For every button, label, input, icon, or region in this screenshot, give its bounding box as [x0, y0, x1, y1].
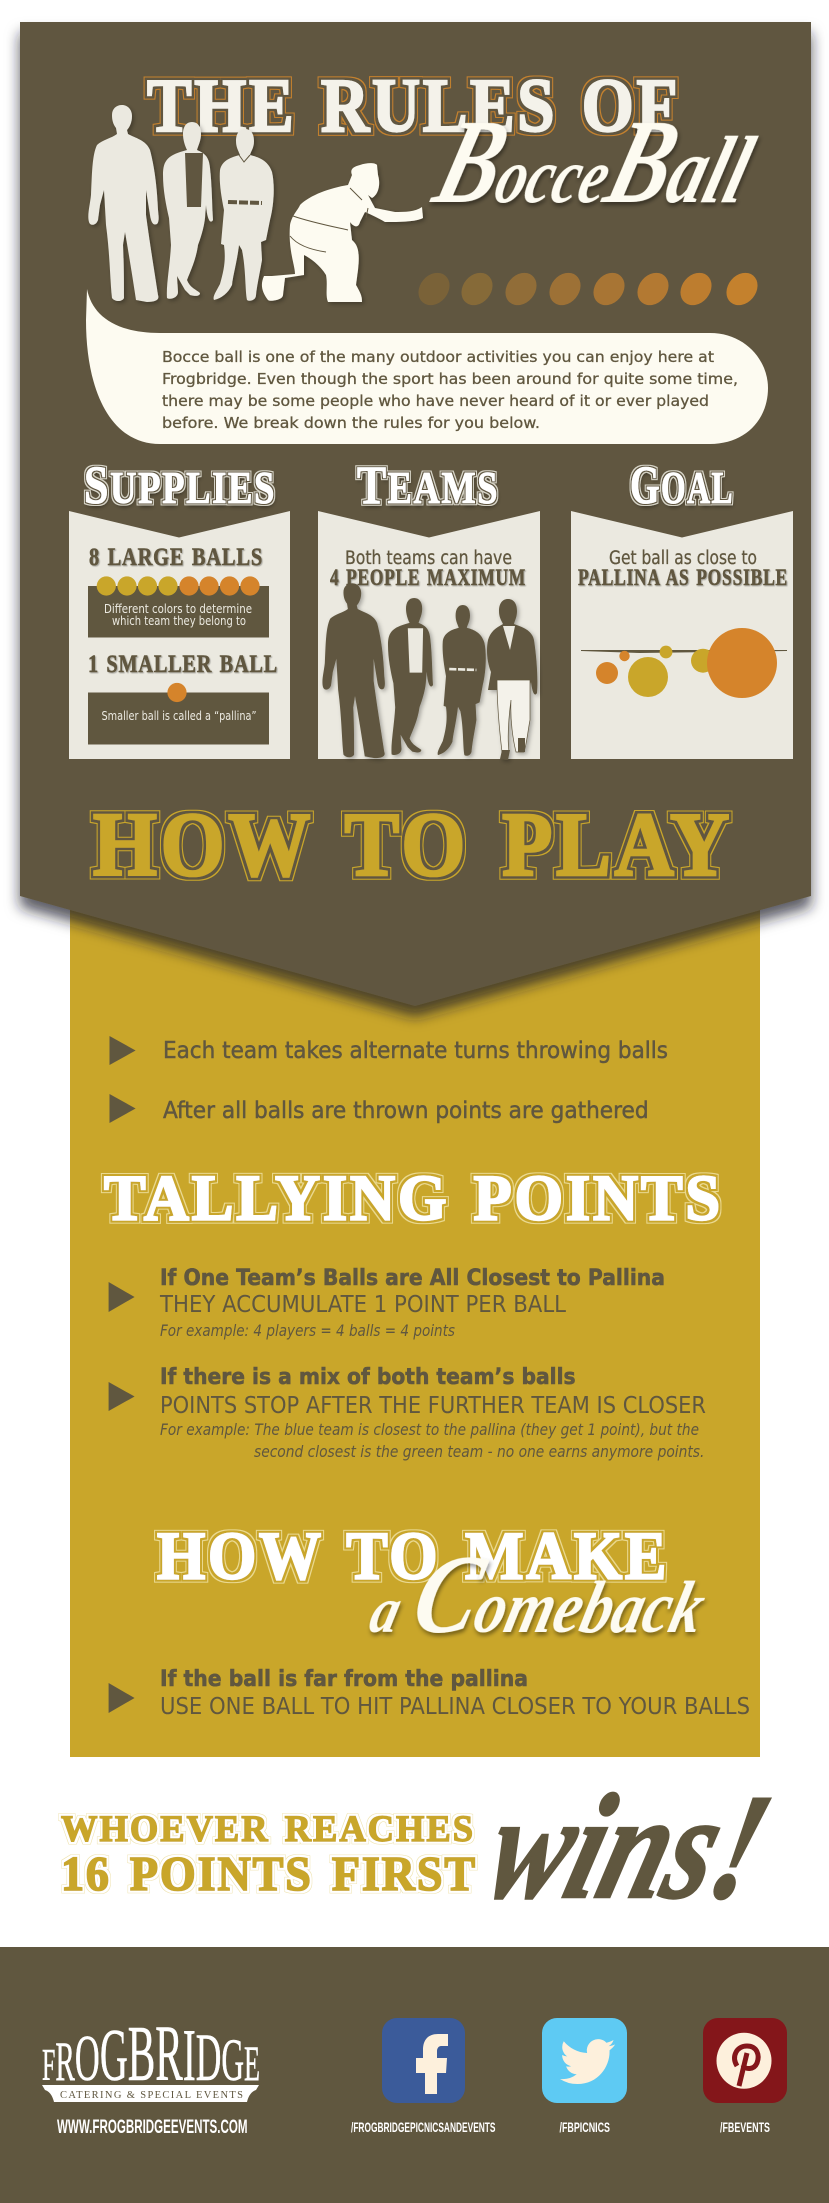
label: pinterest handle: /FBEVENTS: [720, 2119, 770, 2135]
heading: How To Play: HOW TO PLAY: [93, 794, 733, 895]
intro paragraph: [162, 348, 738, 432]
illustration: four men silhouettes: [322, 583, 537, 760]
title script: Bocce Ball: BocceBall: [421, 96, 771, 228]
intro paragraph: before. We break down the rules for you below.: [162, 414, 540, 432]
dark box: pallina caption: Smaller ball is called a “pallina”: [102, 708, 256, 723]
comeback rule: If the ball is far from the pallina: [160, 1666, 528, 1692]
eight balls: [97, 576, 260, 596]
tally rule: mix of balls: [109, 1364, 706, 1461]
row of eight fading ovals: [412, 267, 764, 311]
comeback rule: USE ONE BALL TO HIT PALLINA CLOSER TO YOUR BALLS: [160, 1694, 750, 1720]
tally rule: one team closest: If One Team’s Balls are All Closest to Pallina: [160, 1265, 665, 1291]
text: get ball as close to: Get ball as close to: [609, 548, 757, 569]
tally rule: one team closest: [109, 1265, 665, 1340]
icon: twitter: [542, 2018, 627, 2103]
diagram: balls around the pallina line: [581, 628, 787, 698]
illustration: kneeling bowler silhouette: [262, 163, 423, 302]
comeback rule: [109, 1666, 750, 1720]
illustration: three standing men silhouettes: [88, 105, 274, 302]
intro paragraph: Frogbridge. Even though the sport has been around for quite some time,: [162, 370, 738, 388]
heading: Goal: GOAL: [630, 455, 734, 515]
logo: Frogbridge: CATERING & SPECIAL EVENTS: [60, 2090, 243, 2101]
tally rule: one team closest: THEY ACCUMULATE 1 POINT PER BALL: [159, 1292, 566, 1318]
heading: Teams: TEAMS: [357, 455, 499, 515]
header banner: brown chevron: [20, 22, 811, 1006]
dark box: colors caption: Different colors to determine: [104, 601, 252, 616]
rule: alternate turns: Each team takes alternate turns throwing balls: [163, 1038, 668, 1064]
closing line: whoever reaches: WHOEVER REACHES: [61, 1809, 475, 1850]
website address: WWW.FROGBRIDGEEVENTS.COM: [57, 2117, 248, 2138]
heading script: a Comeback: a Comeback: [361, 1533, 722, 1657]
label: facebook handle: /FROGBRIDGEPICNICSANDEVENTS: [351, 2119, 496, 2135]
dark box: colors caption: [88, 586, 269, 638]
intro paragraph: there may be some people who have never heard of it or ever played: [162, 392, 709, 410]
panel: teams: [318, 511, 540, 760]
subheading: 1 smaller ball: 1 SMALLER BALL: [88, 651, 278, 678]
subheading: 8 large balls: 8 LARGE BALLS: [89, 544, 263, 571]
tally rule: mix of balls: POINTS STOP AFTER THE FURTHER TEAM IS CLOSER: [160, 1393, 706, 1419]
closing line: 16 points first: 16 POINTS FIRST: [61, 1846, 477, 1901]
how to play panel: gold background: [70, 880, 760, 1757]
pallina ball: [167, 683, 187, 702]
dark box: pallina caption: [88, 692, 269, 744]
tally rule: one team closest: For example: 4 players = 4 balls = 4 points: [160, 1321, 455, 1340]
icon: facebook: [382, 2018, 465, 2103]
footer panel: [0, 1947, 829, 2203]
intro speech bubble: [86, 289, 768, 444]
tally rule: mix of balls: second closest is the green team - no one earns anymore points.: [254, 1442, 704, 1461]
logo: Frogbridge: FROGBRIDGE: [42, 2011, 260, 2098]
intro paragraph: Bocce ball is one of the many outdoor activities you can enjoy here at: [162, 348, 714, 366]
title: The Rules Of: THE RULES OF: [147, 64, 680, 148]
tally rule: mix of balls: If there is a mix of both team’s balls: [160, 1364, 576, 1390]
rule: points gathered: After all balls are thrown points are gathered: [163, 1098, 649, 1124]
label: twitter handle: /FBPICNICS: [560, 2119, 610, 2135]
tally rule: mix of balls: For example: The blue team is closest to the pallina (they get 1 point), but the: [160, 1420, 699, 1439]
heading: How To Make: HOW TO MAKE: [157, 1518, 669, 1594]
panel: goal: [571, 511, 793, 759]
panel: supplies: [69, 511, 290, 759]
dark box: colors caption: which team they belong to: [112, 613, 246, 628]
text: both teams can have: Both teams can have: [345, 548, 512, 569]
heading: Tallying Points: TALLYING POINTS: [104, 1162, 723, 1234]
icon: pinterest: [703, 2018, 787, 2103]
heading: Supplies: SUPPLIES: [84, 455, 276, 515]
subheading: 4 people maximum: 4 PEOPLE MAXIMUM: [330, 565, 526, 590]
